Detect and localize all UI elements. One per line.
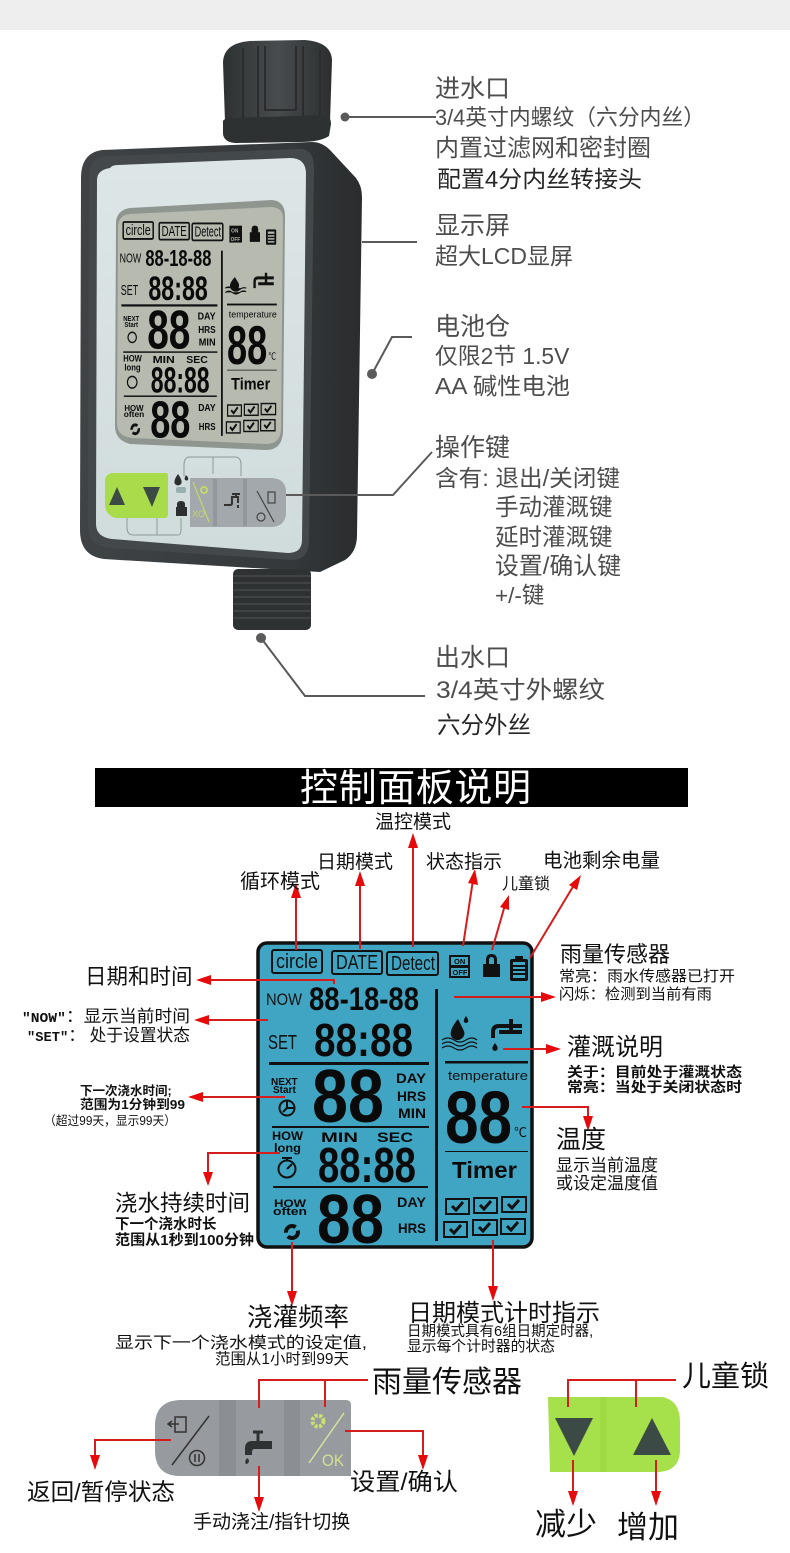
callout: battery: 仅限2节 1.5V	[435, 343, 570, 369]
arrow: battery level	[530, 875, 581, 958]
callout: operation keys: 手动灌溉键	[495, 494, 612, 520]
arrow: manual pour	[254, 1466, 264, 1512]
label: temperature mode: 温控模式	[375, 811, 451, 833]
blue LCD panel: circle	[276, 951, 318, 973]
leader: display	[362, 241, 417, 243]
label: watering duration	[115, 1191, 254, 1249]
blue LCD panel: HRS	[397, 1088, 426, 1104]
label: next start: 范围为1分钟到99	[80, 1097, 185, 1112]
label: date timer indicator: 日期模式计时指示	[408, 1300, 600, 1327]
label: rain sensor: 闪烁：检测到当前有雨	[559, 986, 712, 1003]
callout: battery: 电池仓	[435, 313, 510, 341]
LCD contents (device): SET	[121, 282, 138, 298]
arrow: watering duration	[203, 1153, 280, 1186]
on off indicator: OFF	[452, 968, 468, 977]
label: temperature: 或设定温度值	[556, 1174, 658, 1193]
arrow: next start	[188, 1092, 285, 1102]
callout: water outlet	[435, 644, 605, 738]
callout: battery	[435, 313, 570, 399]
leader: battery compartment	[367, 337, 412, 379]
LCD contents (device): OFF	[231, 237, 241, 243]
arrow: rain sensor	[454, 992, 556, 1002]
LCD contents (device): HOW	[123, 354, 142, 364]
arrow: date and time	[196, 975, 334, 985]
callout: operation keys: +/-键	[495, 583, 544, 608]
label: child lock: 儿童锁	[502, 874, 550, 893]
arrow: decrease	[568, 1460, 578, 1506]
blue LCD panel: MIN	[321, 1129, 358, 1145]
blue LCD panel: MIN	[398, 1105, 426, 1121]
callout: battery: AA 碱性电池	[435, 373, 570, 399]
icon: up triangle	[633, 1418, 671, 1455]
callout: operation keys: 操作键	[435, 434, 510, 462]
label: rain sensor: 雨量传感器	[560, 942, 670, 967]
LCD contents (device): DAY	[198, 401, 216, 413]
on off indicator: ON	[454, 957, 465, 966]
callout: water inlet: 配置4分内丝转接头	[437, 166, 642, 192]
blue LCD panel: DAY	[397, 1194, 427, 1210]
label: status indicator: 状态指示	[426, 851, 502, 873]
arrow: watering frequency	[287, 1242, 297, 1306]
LCD contents (device): 88	[227, 315, 267, 376]
arrow: date mode	[355, 871, 365, 949]
label: watering frequency: 显示下一个浇水模式的设定值,	[115, 1334, 367, 1352]
label: manual pour: 手动浇注/指针切换	[193, 1511, 350, 1533]
LCD contents (device): DATE	[162, 223, 187, 239]
icon: battery	[510, 956, 528, 981]
label: back pause: 返回/暂停状态	[27, 1479, 175, 1505]
blue LCD panel: 88-18-88	[309, 981, 419, 1017]
LCD contents (device): temperature	[229, 309, 277, 320]
callout: water inlet: 进水口	[435, 75, 510, 103]
blue LCD panel: DAY	[396, 1070, 427, 1086]
callout: water outlet: 出水口	[435, 644, 510, 672]
arrow: timer indicator	[488, 1240, 498, 1301]
LCD contents (device): 88:88	[151, 360, 210, 400]
LCD contents (device): MIN	[199, 336, 216, 348]
icon: rain drop and waves	[442, 1016, 477, 1050]
callout: operation keys	[435, 434, 621, 608]
connector: child lock	[568, 1380, 676, 1407]
label: watering frequency	[115, 1304, 367, 1368]
label: now and set: "NOW"：显示当前时间	[22, 1007, 190, 1027]
callout: display: 超大LCD显屏	[435, 243, 573, 269]
callout: water inlet: 内置过滤网和密封圈	[435, 135, 651, 162]
LCD contents (device): HRS	[199, 420, 216, 432]
top band	[0, 0, 790, 30]
arrow: temperature mode	[408, 833, 418, 947]
blue LCD panel: HOW	[274, 1198, 307, 1210]
product photo: irrigation timer	[80, 40, 362, 630]
label: increase: 增加	[617, 1510, 679, 1545]
callout: operation keys: 设置/确认键	[495, 553, 621, 580]
label: next start	[44, 1083, 185, 1128]
icon: settings ok: OK	[322, 1451, 345, 1470]
label: temperature: 温度	[556, 1126, 606, 1154]
label: date timer indicator: 显示每个计时器的状态	[407, 1338, 555, 1355]
arrow: child lock	[492, 895, 509, 950]
blue LCD panel: 88	[312, 1054, 384, 1138]
icon: next start clock	[280, 1100, 294, 1116]
label: watering frequency: 范围从1小时到99天	[215, 1350, 349, 1368]
LCD contents (device): Timer	[231, 375, 270, 394]
LCD contents (device): 88	[147, 298, 190, 360]
callout: operation keys: 延时灌溉键	[495, 524, 612, 550]
green arrow keys panel	[548, 1397, 680, 1472]
blue LCD panel: DATE	[336, 952, 378, 974]
label: date timer indicator	[407, 1300, 600, 1355]
icon: stopwatch	[278, 1158, 296, 1178]
label: date and time: 日期和时间	[85, 965, 193, 989]
label: irrigation note: 灌溉说明	[567, 1034, 663, 1061]
LCD screen	[117, 207, 283, 444]
LCD contents (device): ON	[231, 228, 239, 234]
on off indicator	[449, 955, 470, 978]
LCD contents (device): long	[124, 363, 141, 373]
icon: settings ok	[309, 1413, 345, 1470]
blue LCD panel: temperature	[448, 1068, 528, 1083]
rain and lock icons on device	[174, 474, 188, 516]
icon: lock	[483, 954, 500, 977]
LCD contents (device): 88	[150, 390, 190, 448]
label: circle mode: 循环模式	[240, 870, 320, 893]
label: irrigation note	[567, 1034, 742, 1095]
label: battery level: 电池剩余电量	[543, 850, 660, 872]
callout: water outlet: 3/4英寸外螺纹	[436, 677, 605, 704]
LCD bezel	[115, 200, 285, 450]
label: date mode: 日期模式	[317, 851, 393, 873]
label: temperature	[556, 1126, 658, 1193]
arrow: status indicator	[463, 869, 478, 946]
LCD contents (device): 88:88	[148, 269, 208, 308]
label: next start: 下一次浇水时间;	[80, 1083, 172, 1098]
callout: water inlet	[435, 75, 705, 192]
LCD contents (device): ℃	[268, 351, 276, 362]
blue LCD panel: HOW	[272, 1129, 304, 1143]
water inlet cap	[223, 40, 332, 143]
icon: exit and pause	[168, 1416, 209, 1466]
LCD contents (device): Start	[124, 322, 139, 329]
label: watering duration: 范围从1秒到100分钟	[115, 1232, 254, 1249]
icon: faucet key	[245, 1432, 272, 1464]
icon: down triangle	[555, 1418, 593, 1456]
label: rain sensor: 常亮：雨水传感器已打开	[559, 968, 735, 985]
label: date timer indicator: 日期模式具有6组日期定时器,	[407, 1323, 593, 1340]
outer housing	[80, 142, 362, 572]
arrow: temperature	[522, 1107, 593, 1131]
callout: operation keys: 含有: 退出/关闭键	[435, 465, 620, 491]
connector: rain sensor	[259, 1380, 368, 1408]
LCD contents (device): often	[124, 409, 145, 419]
blue LCD panel: SET	[268, 1032, 297, 1054]
blue LCD panel: ℃	[514, 1125, 527, 1140]
operation keys on device: XO	[192, 509, 205, 519]
LCD contents (device): circle	[126, 222, 151, 239]
housing rim	[88, 149, 314, 560]
blue LCD panel: NOW	[266, 990, 302, 1009]
blue LCD panel: 88	[445, 1076, 512, 1159]
arrow: back pause	[90, 1440, 171, 1470]
timer check boxes	[444, 1197, 526, 1237]
LCD contents (device): HOW	[124, 403, 144, 413]
blue LCD panel: Start	[273, 1085, 296, 1096]
label: irrigation note: 常亮：当处于关闭状态时	[567, 1079, 742, 1095]
leader: water inlet	[340, 112, 436, 122]
label: temperature: 显示当前温度	[556, 1156, 658, 1175]
LCD contents (device): 88-18-88	[145, 245, 211, 272]
title bar	[95, 768, 688, 810]
callout: water outlet: 六分外丝	[437, 712, 531, 738]
label: watering frequency: 浇灌频率	[247, 1304, 349, 1332]
LCD contents (device): MIN	[153, 353, 175, 365]
label: watering duration: 浇水持续时间	[115, 1191, 250, 1216]
label: decrease: 减少	[535, 1507, 597, 1542]
label: watering duration: 下一个浇水时长	[115, 1216, 217, 1233]
label: rain sensor key: 雨量传感器	[372, 1366, 522, 1399]
blue LCD panel: SEC	[377, 1129, 413, 1145]
blue LCD panel: 88:88	[314, 1014, 413, 1066]
blue LCD panel: Detect	[391, 953, 435, 975]
outlet thread	[233, 569, 311, 630]
LCD contents (device): SEC	[186, 353, 208, 365]
arrow: circle mode	[291, 883, 301, 950]
blue LCD panel	[258, 943, 532, 1258]
label: now and set	[22, 1007, 190, 1046]
label: irrigation note: 关于：目前处于灌溉状态	[567, 1064, 742, 1080]
arrow: irrigation state	[503, 1044, 561, 1054]
title bar: 控制面板说明	[300, 768, 531, 810]
left button frames	[127, 457, 241, 535]
LCD contents (device): NOW	[120, 253, 141, 266]
LCD contents (device): DAY	[198, 310, 216, 322]
callout: water inlet: 3/4英寸内螺纹（六分内丝）	[435, 105, 705, 130]
leader: operation keys	[286, 452, 432, 495]
callout: display: 显示屏	[435, 212, 510, 240]
label: child lock key: 儿童锁	[682, 1360, 769, 1393]
label: set confirm: 设置/确认	[350, 1469, 458, 1496]
LCD contents (device)	[120, 222, 277, 448]
operation keys on device	[190, 478, 286, 527]
blue LCD panel: 88	[317, 1180, 384, 1258]
LCD contents (device): NEXT	[123, 316, 140, 323]
icon: refresh	[286, 1226, 298, 1238]
blue LCD panel: 88:88	[318, 1139, 416, 1193]
icon: faucet	[492, 1019, 522, 1051]
arrow: set confirm	[345, 1431, 428, 1470]
blue LCD panel: often	[273, 1206, 307, 1218]
blue LCD panel: Timer	[452, 1157, 517, 1183]
blue LCD panel: NEXT	[271, 1077, 298, 1088]
blue LCD panel: HRS	[398, 1220, 426, 1236]
callout: display	[435, 212, 573, 269]
arrow: increase	[651, 1460, 661, 1506]
up down buttons on device	[105, 473, 168, 518]
blue LCD panel: long	[274, 1141, 301, 1155]
leader: water outlet	[256, 633, 425, 696]
label: now and set: "SET"： 处于设置状态	[27, 1026, 190, 1046]
control keys panel	[155, 1400, 351, 1476]
label: next start: （超过99天，显示99天）	[44, 1113, 176, 1128]
LCD contents (device): HRS	[198, 323, 216, 335]
front face	[96, 158, 306, 553]
LCD contents (device): Detect	[195, 224, 221, 240]
label: rain sensor	[559, 942, 735, 1003]
arrow: now and set	[194, 1015, 268, 1025]
